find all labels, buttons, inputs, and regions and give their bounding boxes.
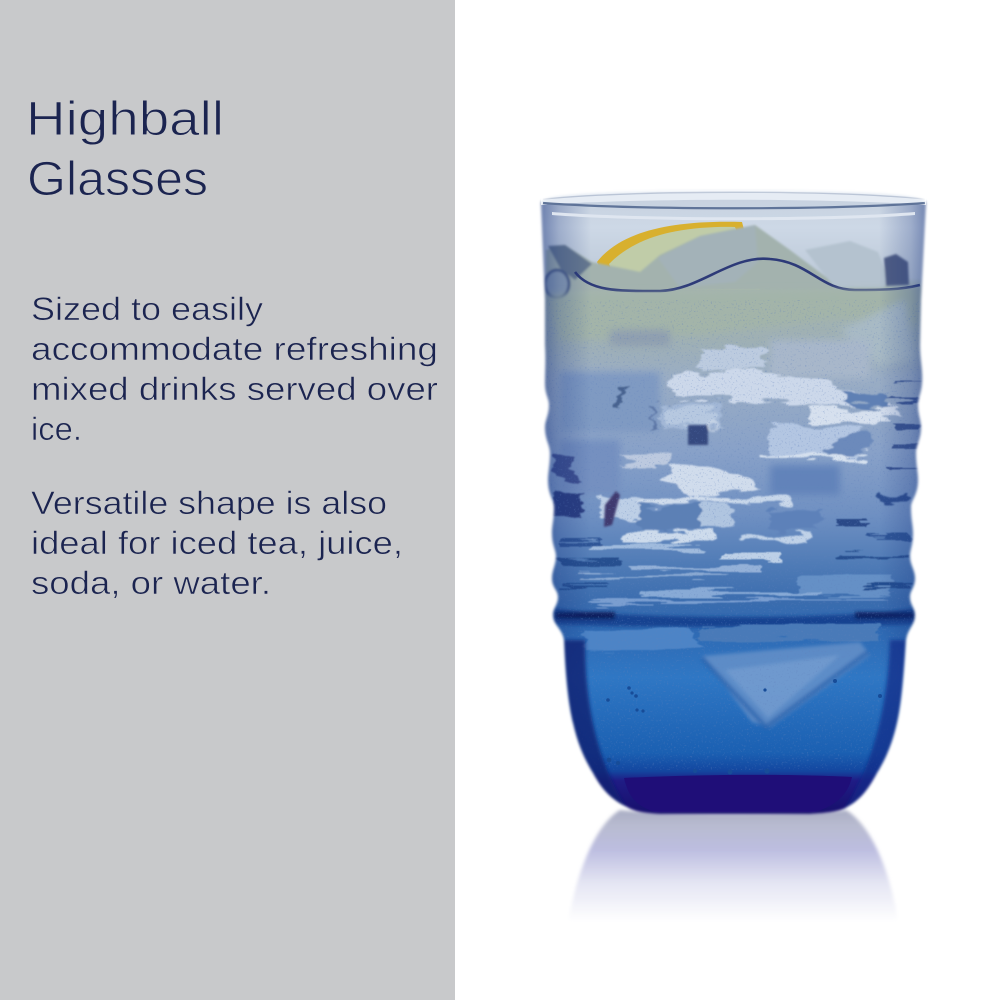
bottom glass base: [624, 775, 852, 812]
reflection of the glass: [568, 810, 898, 922]
ice above waterline: [545, 225, 909, 298]
grain texture over the liquid: [545, 300, 925, 770]
text block: first description paragraph: Sized to easily: [31, 291, 263, 327]
text block: second description paragraph: soda, or water.: [31, 565, 271, 601]
text block: first description paragraph: ice.: [31, 411, 82, 447]
title: Highball Glasses: Glasses: [27, 153, 208, 206]
title: Highball Glasses: [26, 93, 224, 206]
icon: highball glass photo illustration: [535, 188, 935, 818]
text block: second description paragraph: ideal for iced tea, juice,: [31, 525, 403, 561]
submerged ice cube: [702, 642, 870, 728]
panel: grey text background: [0, 0, 455, 1000]
left and right bowl walls: [562, 640, 907, 814]
title: Highball Glasses: Highball: [26, 93, 224, 146]
ice cubes below waterline: pale and dark patches: [545, 290, 921, 603]
water line: [575, 259, 920, 291]
rim band: [541, 190, 926, 220]
lemon slice: [597, 222, 744, 273]
text block: first description paragraph: mixed drinks served over: [31, 371, 438, 407]
glass body gradient: [535, 188, 935, 818]
dark band at the shoulder of the glass: [553, 608, 916, 627]
lower liquid bubbles: [606, 679, 882, 774]
text block: first description paragraph: [31, 291, 438, 447]
text block: second description paragraph: Versatile shape is also: [31, 485, 387, 521]
text block: first description paragraph: accommodate refreshing: [31, 331, 438, 367]
side shading: [540, 200, 928, 640]
text block: second description paragraph: [31, 485, 403, 601]
